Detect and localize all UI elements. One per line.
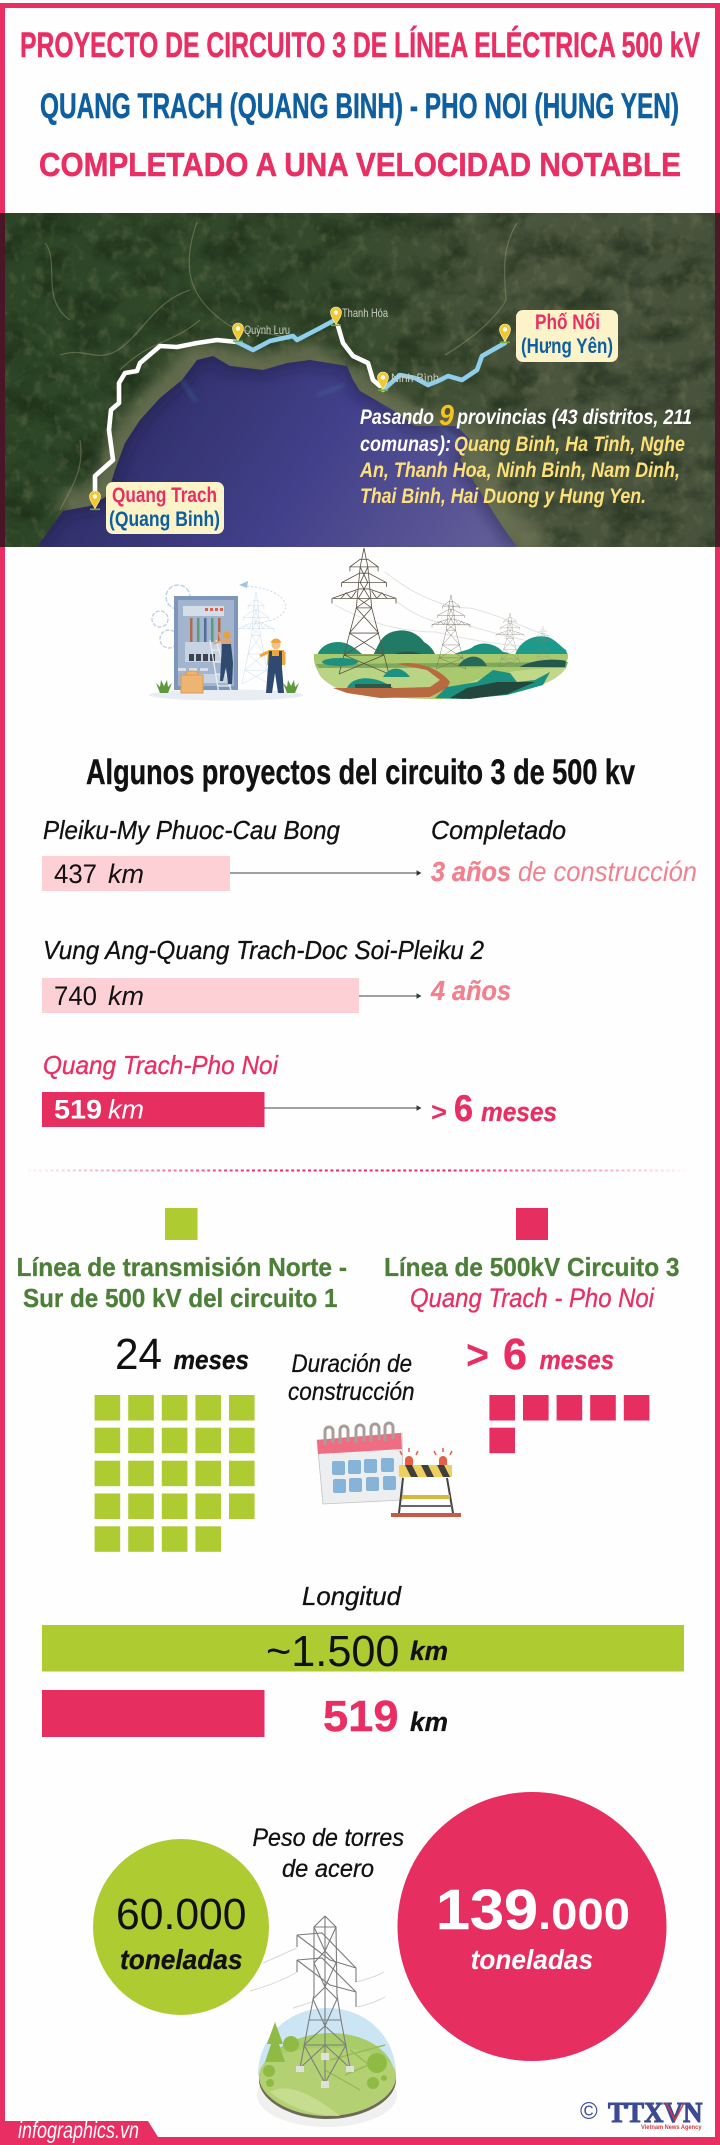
map place names: Thanh Hóa [342,306,388,320]
icon: power towers in landscape [314,548,568,699]
gears [152,585,190,648]
label: construction duration: construcción [288,1378,415,1406]
bar: 1500 km [42,1625,684,1676]
provinces text: Quang Binh, Ha Tinh, Nghe [454,433,685,456]
row 3: km [108,1094,144,1124]
stat: more than 6 months [466,1330,614,1379]
map place names: Quỳnh Lưu [244,323,290,337]
map place names [244,306,439,385]
back bushes [317,630,568,664]
stat: 24 months: 24 [115,1330,162,1379]
tower [297,1916,356,2083]
toolbox [181,671,203,693]
stat circle: 60000 tons: 60.000 [116,1890,246,1939]
bar: 519 km: km [410,1707,448,1737]
map sea [30,350,530,550]
dotted arc [247,586,286,624]
agency wordmark: TTXVN [608,2098,702,2129]
provinces text: comunas): [360,433,451,456]
row 2: Vung Ang-Quang Trach-Doc Soi-Pleiku 2 [43,935,484,965]
stat: more than 6 months: 6 [503,1330,527,1379]
provinces text: Pasando [360,406,434,429]
climbing worker [213,631,233,684]
wires [250,1948,385,2008]
chart: projects comparison [42,815,697,1129]
map pins [90,307,510,510]
row 1: 437 [54,859,97,889]
left legend: Sur de 500 kV del circuito 1 [23,1283,338,1313]
wires [335,572,548,648]
copyright symbol: © [580,2098,598,2125]
towers [332,548,552,674]
icon: workers at electrical cabinet [149,581,303,700]
stat circle: 60000 tons: toneladas [120,1944,242,1975]
logo: TTXVN [580,2098,702,2131]
left legend [16,1208,347,1313]
provinces text [359,400,692,508]
row 1: de construcción [518,856,697,887]
row 2 [42,935,511,1013]
stat circle: 139000 tons [398,1792,666,2061]
row 2: 740 [54,981,97,1011]
map land [0,213,720,547]
cabinet [174,596,238,690]
stat: more than 6 months: meses [540,1345,614,1375]
route line [95,321,505,500]
label: Quang Trach: Quang Trach [112,484,217,507]
panel: comparison legend [16,1208,680,1313]
tower feet [296,2053,354,2088]
label: Pho Noi [516,310,618,362]
calendar [317,1423,403,1504]
row 2: km [108,981,144,1011]
label: Quang Trach [106,482,224,534]
stat circle: 139000 tons: 139 [436,1878,538,1942]
provinces text: Thai Binh, Hai Duong y Hung Yen. [360,485,646,508]
panel: route map [0,213,720,550]
left legend: Línea de transmisión Norte - [16,1252,347,1282]
barrier [391,1448,461,1517]
stat: 24 months [115,1330,249,1379]
row 1 [42,815,697,891]
ground [314,654,568,699]
bar: 519 km [42,1690,448,1741]
bar: 519 km: 519 [323,1692,398,1741]
front bushes [322,657,566,699]
label: length: Longitud [302,1581,403,1611]
standing worker [260,638,285,693]
stat: 24 months: meses [174,1345,249,1375]
row 1: Completado [431,815,566,845]
label: construction duration: Duración de [292,1350,412,1378]
icon: calendar and barrier [317,1423,461,1517]
title block [20,25,700,183]
row 3 [42,1050,557,1129]
paper plane [239,581,248,588]
footer tab [0,2117,720,2145]
stat: more than 6 months: > [466,1331,489,1378]
row 3: Quang Trach-Pho Noi [43,1050,279,1080]
plants [156,680,172,693]
footer tab: infographics.vn [18,2117,139,2143]
chart: 24 green month squares [95,1395,255,1552]
stat circle: 60000 tons [93,1839,269,2015]
label: Quang Trach: (Quang Binh) [109,508,220,531]
label: steel tower weight: de acero [282,1855,374,1883]
right legend: Línea de 500kV Circuito 3 [384,1252,680,1282]
row 3: meses [481,1097,557,1127]
light tower [238,592,274,684]
provinces text: 9 [439,400,454,432]
road [333,663,450,698]
bar: 1500 km: ~1.500 [266,1627,400,1676]
row 3: 519 [54,1094,102,1124]
agency subtitle: Vietnam News Agency [641,2124,702,2131]
right legend [384,1208,680,1313]
trees [263,2022,387,2089]
row 1: km [108,859,144,889]
row 3: 6 [454,1088,473,1129]
stat circle: 139000 tons: .000 [538,1890,630,1939]
chart: 6 pink month squares [489,1395,649,1453]
row 2: 4 años [430,975,511,1006]
icon: steel tower on island [250,1916,397,2127]
chart: length comparison [42,1581,684,1741]
label: Pho Noi: (Hưng Yên) [521,335,613,358]
row 1: 3 años [431,856,511,887]
right legend: Quang Trach - Pho Noi [410,1283,655,1313]
row 3: > [431,1097,447,1127]
label: construction duration [288,1350,415,1406]
label: steel tower weight: Peso de torres [252,1824,404,1852]
ladder [210,640,232,694]
label: Pho Noi: Phố Nối [535,311,600,334]
bar: 1500 km: km [410,1636,448,1666]
label: steel tower weight [252,1824,404,1883]
stat circle: 139000 tons: toneladas [471,1944,593,1975]
row 1: Pleiku-My Phuoc-Cau Bong [43,815,340,845]
map place names: Ninh Bình [391,371,439,385]
